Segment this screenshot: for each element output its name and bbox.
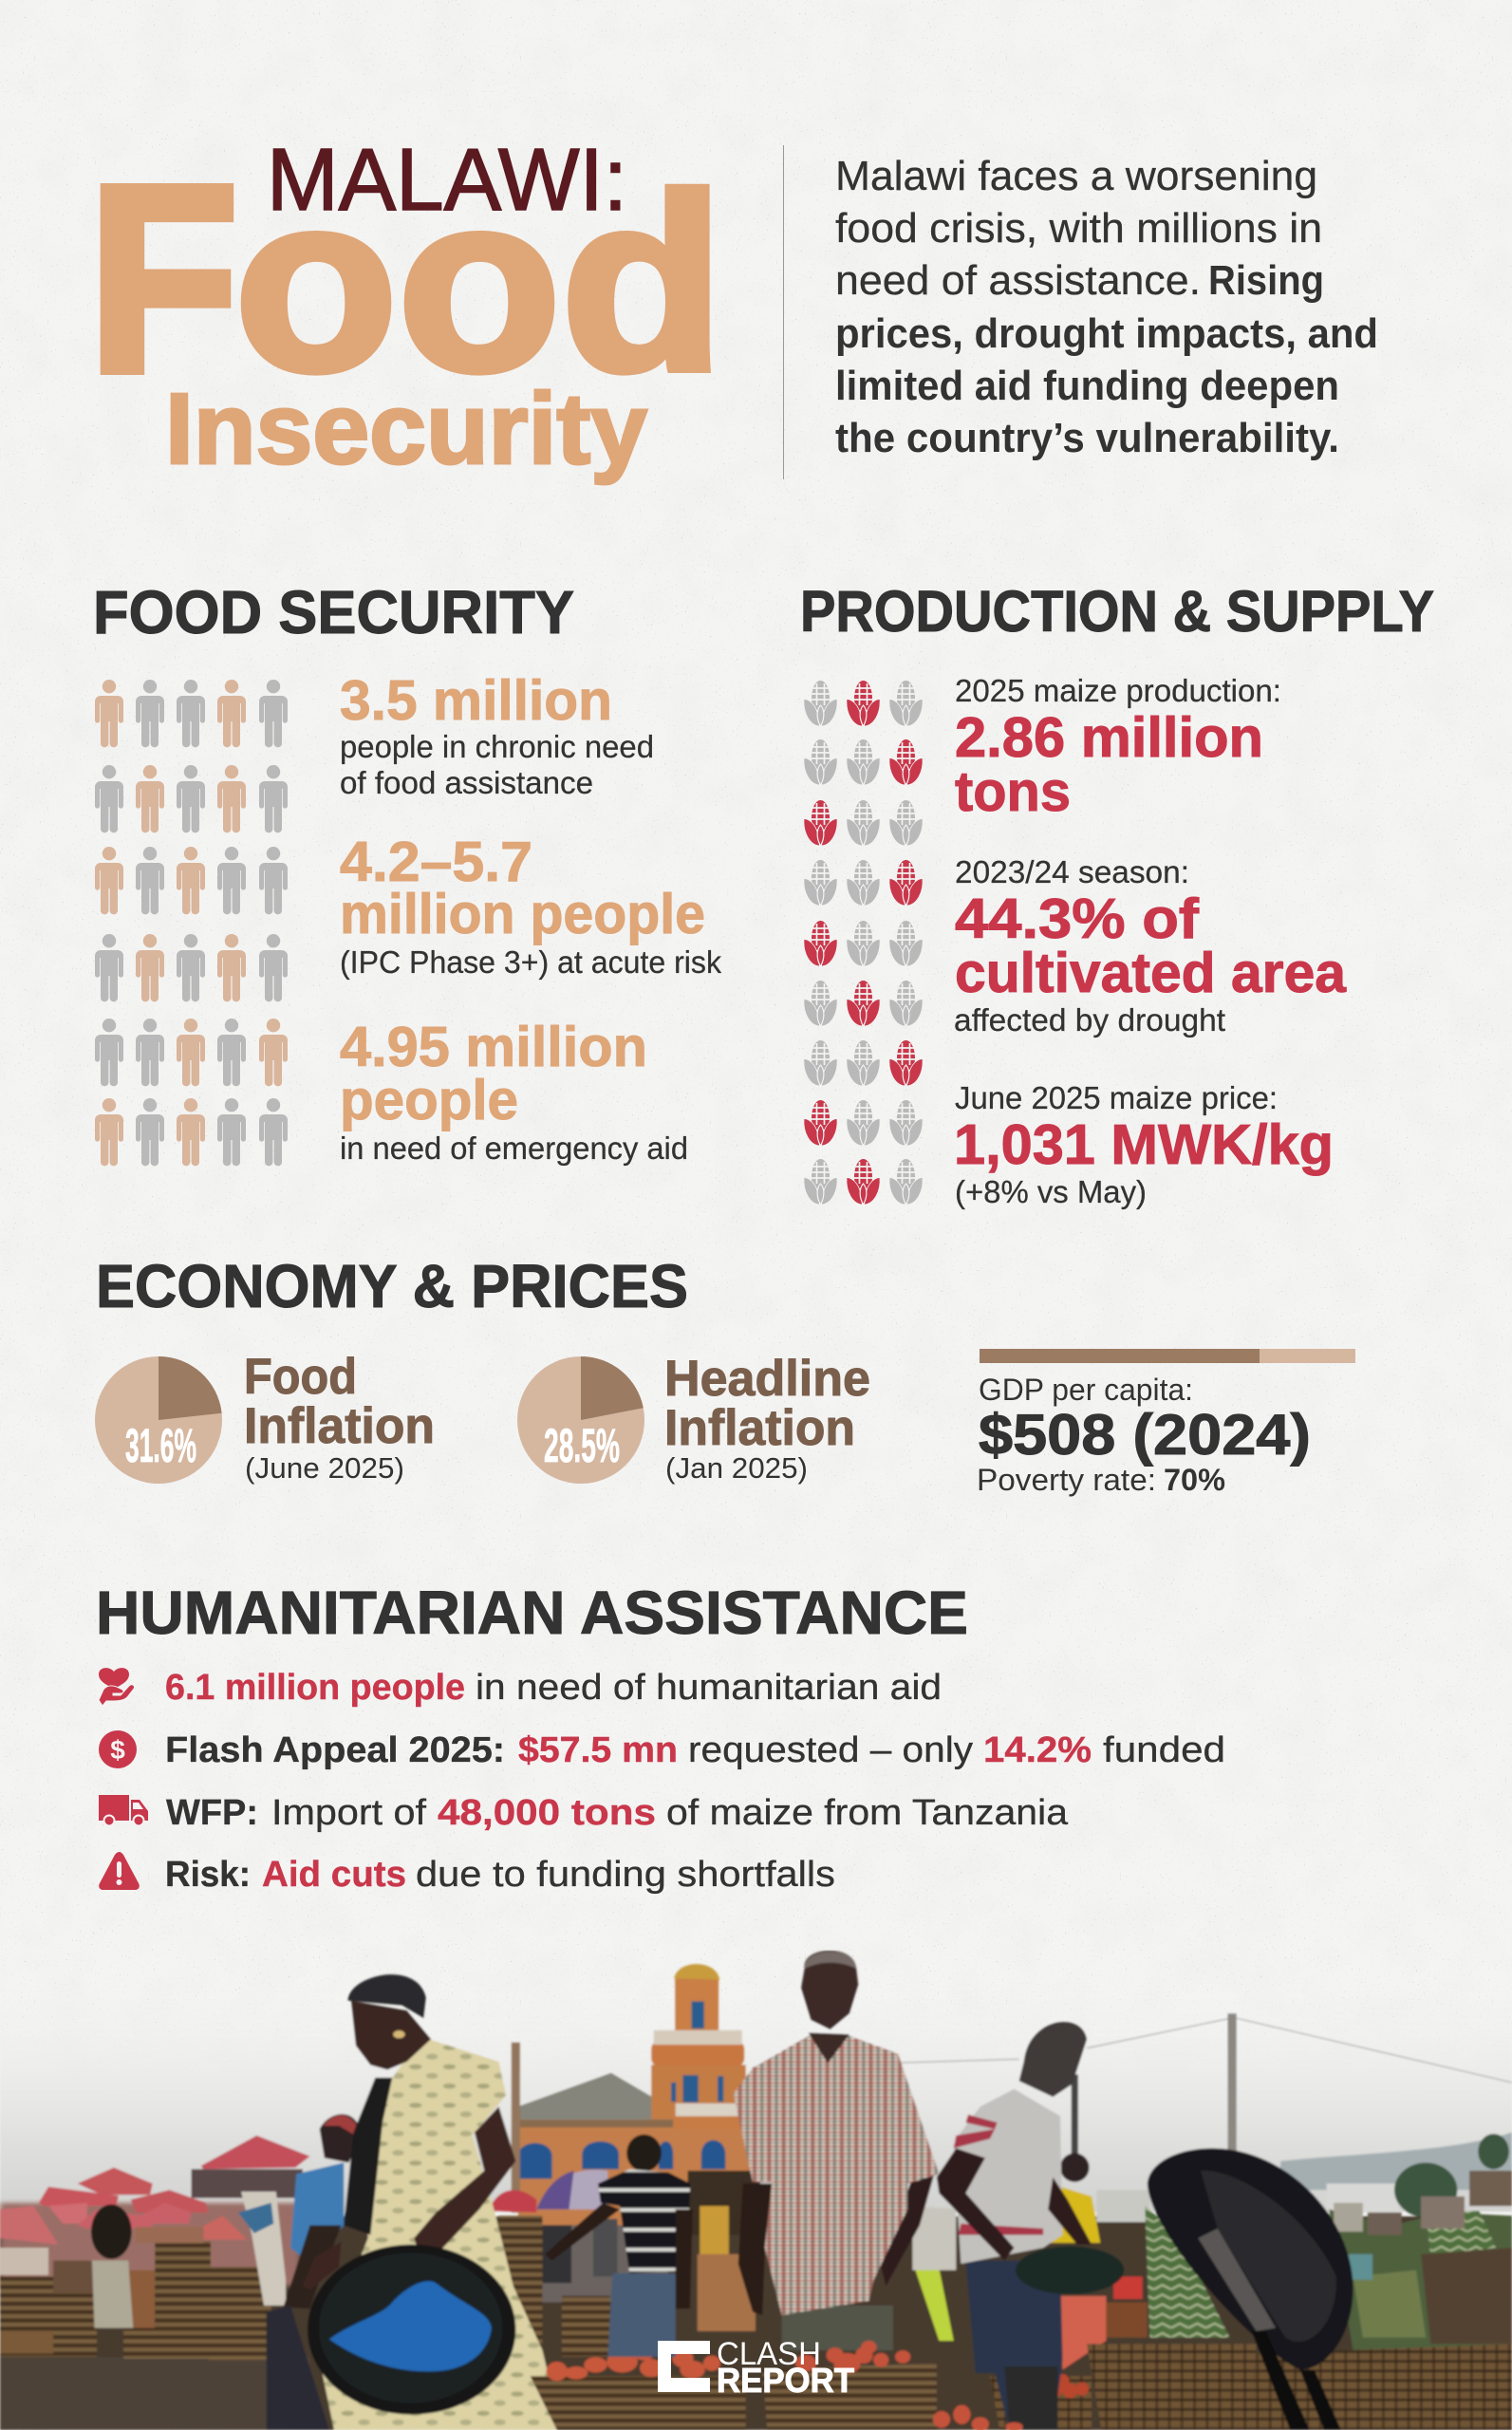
title: Food [88, 131, 724, 427]
stat: 3.5 million: 3.5 million [340, 669, 612, 732]
icon: heart in hand [99, 1668, 135, 1706]
title: Food: ood [234, 142, 724, 422]
row: risk: Aid cuts [262, 1855, 406, 1895]
arched windows [518, 2143, 552, 2178]
crowd on right [1329, 2209, 1512, 2350]
row: WFP import: Import of [271, 1793, 426, 1833]
row: risk [99, 1852, 835, 1895]
stat: 4.2-5.7 million people [340, 831, 721, 980]
dress [320, 2039, 562, 2430]
pie: food inflation: 31.6% [125, 1419, 196, 1472]
stallholders [91, 2204, 132, 2259]
stat: maize production: 2.86 million [955, 706, 1263, 769]
intro paragraph: Rising [1208, 257, 1324, 304]
sky haze [0, 1984, 1512, 2212]
row: WFP import: WFP: [166, 1793, 258, 1833]
vertical divider [783, 145, 784, 479]
stat: 4.95 million people: in need of emergency aid [340, 1131, 688, 1166]
icon: warning triangle [99, 1852, 140, 1890]
row: flash appeal [99, 1730, 1225, 1770]
stat: drought area: cultivated area [955, 942, 1347, 1004]
stat: maize production: tons [955, 760, 1071, 823]
stat: maize production [955, 673, 1281, 823]
title: Insecurity: Insecurity [165, 373, 647, 485]
stat: 4.95 million people: people [340, 1069, 518, 1131]
intro paragraph: the country’s vulnerability. [835, 415, 1339, 461]
row: flash appeal: funded [1103, 1730, 1225, 1770]
stat: 4.2-5.7 million people: 4.2–5.7 [340, 831, 532, 893]
stat: 4.95 million people [340, 1016, 688, 1166]
ground and far market [0, 2216, 1512, 2430]
stat: maize price: 1,031 MWK/kg [954, 1113, 1334, 1176]
row: people in need: 6.1 million people [165, 1668, 465, 1708]
stat: 3.5 million: people in chronic need [340, 729, 654, 764]
label: food inflation: (June 2025) [245, 1451, 404, 1485]
plaid shirt man [734, 1951, 939, 2350]
label: food inflation [244, 1349, 435, 1485]
right market background [753, 2013, 1512, 2430]
neon trousers figure [915, 2269, 954, 2341]
young man with bowl [937, 2022, 1124, 2430]
wires [753, 2018, 1512, 2083]
row: WFP import [99, 1793, 1069, 1833]
label: food inflation: Inflation [244, 1398, 435, 1454]
bucket [308, 2245, 515, 2415]
row: WFP import: of maize from Tanzania [666, 1793, 1069, 1833]
stat: maize price: (+8% vs May) [955, 1174, 1147, 1209]
pie: headline inflation: 28.5% [544, 1419, 620, 1472]
row: flash appeal: 14.2% [983, 1730, 1092, 1770]
second woman behind [290, 2162, 344, 2264]
hills [1280, 2132, 1512, 2190]
label: headline inflation [664, 1351, 870, 1485]
red umbrellas [0, 2206, 58, 2245]
intro paragraph: limited aid funding deepen [835, 363, 1339, 409]
small tomato heap [1048, 2374, 1089, 2399]
intro paragraph: prices, drought impacts, and [835, 310, 1378, 357]
title: MALAWI: MALAWI: [267, 130, 627, 229]
bar: GDP per capita [980, 1349, 1355, 1363]
stat: drought area: 2023/24 season: [955, 854, 1189, 889]
pictogram: people grid [95, 680, 288, 1166]
logo: Clash Report: CLASH [717, 2336, 821, 2372]
stat: 3.5 million: of food assistance [340, 765, 593, 800]
stat: 4.2-5.7 million people: (IPC Phase 3+) at acute risk [340, 944, 721, 980]
label: headline inflation: Headline [664, 1351, 870, 1407]
woman with bucket [267, 1974, 746, 2430]
row: WFP import: 48,000 tons [438, 1793, 656, 1833]
scarf strap [344, 2078, 392, 2234]
minaret [675, 1978, 719, 2036]
row: flash appeal: Flash Appeal 2025: [165, 1730, 505, 1770]
stat: GDP and poverty: 70% [1164, 1463, 1225, 1497]
intro paragraph: food crisis, with millions in [835, 205, 1322, 252]
label: headline inflation: (Jan 2025) [665, 1451, 808, 1485]
stat: 4.2-5.7 million people: million people [340, 883, 705, 945]
label: headline inflation: Inflation [664, 1400, 855, 1456]
icon: dollar coin [99, 1730, 137, 1768]
stat: GDP and poverty [977, 1373, 1311, 1497]
heading: production and supply: PRODUCTION & SUPPLY [800, 579, 1434, 644]
stat: 3.5 million [340, 669, 654, 800]
heading: economy and prices: ECONOMY & PRICES [96, 1252, 688, 1320]
arm right [414, 2106, 515, 2261]
heading: food security: FOOD SECURITY [93, 578, 574, 646]
stat: GDP and poverty: $508 (2024) [979, 1403, 1311, 1467]
stat: GDP and poverty: GDP per capita: [979, 1373, 1193, 1407]
row: people in need: in need of humanitarian aid [476, 1668, 942, 1708]
stat: maize price: June 2025 maize price: [955, 1080, 1278, 1115]
baskets [1087, 2344, 1257, 2430]
stat: 4.95 million people: 4.95 million [340, 1016, 647, 1078]
logo mark [658, 2341, 710, 2392]
intro paragraph [835, 153, 1378, 461]
stat: maize price [954, 1080, 1334, 1209]
left market background [0, 2136, 310, 2430]
logo: Clash Report [658, 2336, 854, 2400]
utility pole [1228, 2013, 1237, 2152]
row: people in need [99, 1668, 942, 1708]
pie: headline inflation [517, 1356, 644, 1484]
stat: maize production: 2025 maize production: [955, 673, 1281, 708]
tomato basket [531, 2376, 746, 2430]
title block [88, 130, 724, 485]
tomato basket and tomatoes [762, 2341, 1023, 2430]
row: flash appeal: $57.5 mn [518, 1730, 678, 1770]
stat: drought area: affected by drought [954, 1002, 1225, 1037]
heading: humanitarian assistance: HUMANITARIAN ASSISTANCE [96, 1579, 968, 1647]
row: flash appeal: requested – only [688, 1730, 973, 1770]
arm left [303, 2241, 342, 2290]
label: food inflation: Food [244, 1349, 357, 1405]
icon: truck [99, 1795, 148, 1826]
stat: drought area [954, 854, 1347, 1037]
tomatoes [547, 2344, 720, 2381]
mosque building [489, 1964, 760, 2357]
green dress woman [1145, 2206, 1230, 2338]
logo: Clash Report: REPORT [717, 2361, 854, 2400]
intro paragraph: need of assistance. [835, 257, 1201, 304]
photo: market scene [0, 1951, 1512, 2430]
striped shirt man [545, 2135, 693, 2357]
pictogram: maize grid [804, 681, 923, 1205]
intro paragraph: Malawi faces a worsening [835, 153, 1317, 199]
title: Food: F [88, 131, 238, 427]
icon: dollar coin: $ [110, 1735, 125, 1765]
yellow shirt man [1060, 2153, 1090, 2182]
stat: drought area: 44.3% of [955, 888, 1199, 950]
head [351, 2001, 431, 2069]
row: risk: due to funding shortfalls [416, 1855, 835, 1895]
stat: GDP and poverty: Poverty rate: [977, 1463, 1156, 1497]
black upturned basin [1148, 2148, 1353, 2430]
pie: food inflation [95, 1356, 222, 1484]
row: risk: Risk: [165, 1855, 251, 1895]
